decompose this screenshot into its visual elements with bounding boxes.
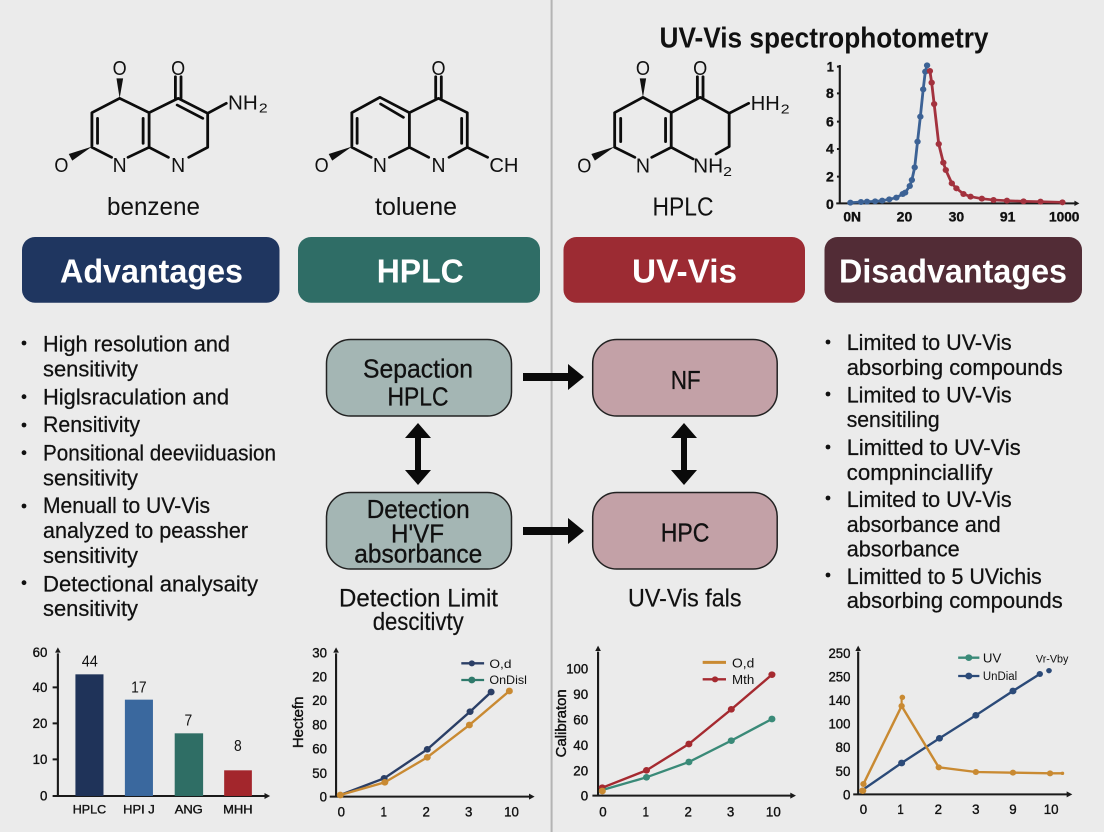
flow box: Separation HPLC <box>326 340 512 416</box>
chart: UV-Vis spectrum: 8 <box>826 85 834 101</box>
chart: calibration: Calibraton <box>553 689 569 757</box>
chart: bars <box>33 644 270 816</box>
molecule: HPLC: HH <box>751 93 780 115</box>
list: disadvantages: absorbing compounds <box>847 355 1063 380</box>
caption: detection limit <box>339 585 498 636</box>
chart: calibration: 40 <box>573 737 588 753</box>
caption: UV-Vis fals: UV-Vis fals <box>628 585 742 613</box>
molecule: benzene: O <box>171 57 185 80</box>
molecule: toluene: O <box>315 154 329 177</box>
chart: UV-Vis spectrum: 2 <box>826 169 834 184</box>
chart: UV line chart: 10 <box>1044 801 1059 817</box>
header: Advantages: Advantages <box>60 253 243 290</box>
list: disadvantages: Limitted to UV-Vis <box>847 435 1021 460</box>
chart: UV line chart: UnDial <box>983 669 1017 683</box>
chart: bars: 20 <box>33 715 48 731</box>
chart: line chart Hectefn: 10 <box>504 804 519 820</box>
header: Disadvantages: Disadvantages <box>839 253 1067 290</box>
chart: calibration <box>553 646 796 820</box>
molecule: HPLC: N <box>636 155 650 178</box>
molecule: benzene: N <box>171 154 185 177</box>
list: disadvantages: absorbing compounds <box>847 588 1063 613</box>
chart: line chart Hectefn: 60 <box>312 741 327 756</box>
flow box: Detection: Detection <box>367 494 470 524</box>
label: HPLC molecule: HPLC <box>652 192 714 222</box>
list: disadvantages: Limited to UV-Vis <box>847 330 1012 355</box>
list: disadvantages: sensitiling <box>847 407 940 432</box>
chart: line chart Hectefn: 1 <box>381 804 387 820</box>
chart: calibration: 2 <box>684 804 692 820</box>
caption: detection limit: descitivty <box>373 608 464 636</box>
chart: calibration: 90 <box>573 686 588 702</box>
header: HPLC <box>298 237 540 303</box>
list: advantages: Ponsitional deeviiduasion <box>43 441 276 466</box>
chart: calibration: 60 <box>573 712 588 727</box>
chart: bars: HPI J <box>123 803 155 816</box>
list: advantages: High resolution and <box>43 332 230 357</box>
molecule: toluene <box>315 57 518 177</box>
arrow: detection to HPC <box>523 518 584 544</box>
molecule: HPLC: 2 <box>781 102 790 116</box>
molecule: toluene: O <box>431 57 446 80</box>
chart: UV-Vis spectrum: 0N <box>843 209 861 224</box>
chart: line chart Hectefn: O,d <box>489 657 511 671</box>
chart: bars: 7 <box>185 713 192 729</box>
chart: UV line chart: 140 <box>828 692 851 708</box>
arrow: NF HPC double <box>671 423 697 485</box>
flow box: NF: NF <box>671 365 701 395</box>
chart: UV line chart: 250 <box>828 669 851 684</box>
chart: line chart Hectefn: 30 <box>312 645 327 660</box>
list: advantages: sensitivity <box>43 596 138 621</box>
list: disadvantages <box>826 330 1063 613</box>
molecule: HPLC: O <box>636 58 650 80</box>
molecule: toluene: CH <box>489 154 518 177</box>
chart: line chart Hectefn: 3 <box>465 804 473 820</box>
chart: UV-Vis spectrum: 1000 <box>1049 209 1080 224</box>
list: advantages: analyzed to peassher <box>43 518 248 543</box>
molecule: benzene: 2 <box>259 101 268 116</box>
title: UV-Vis spectrophotometry <box>660 22 988 54</box>
molecule: benzene: O <box>54 154 68 177</box>
caption: detection limit: Detection Limit <box>339 585 498 613</box>
chart: bars: MHH <box>223 803 253 816</box>
chart: line chart Hectefn: 20 <box>312 692 327 708</box>
list: advantages: Rensitivity <box>43 412 140 437</box>
chart: calibration: 1 <box>643 804 649 820</box>
chart: UV line chart: 80 <box>836 739 851 755</box>
chart: calibration: Mth <box>732 672 754 687</box>
flow box: Detection: absorbance <box>354 539 482 569</box>
chart: line chart Hectefn: 20 <box>312 669 327 684</box>
chart: calibration: 100 <box>566 661 588 677</box>
chart: UV-Vis spectrum: 4 <box>826 141 834 157</box>
chart: UV-Vis spectrum: 30 <box>949 209 964 224</box>
chart: line chart Hectefn: 50 <box>312 765 327 781</box>
flow box: NF <box>593 340 777 416</box>
molecule: HPLC <box>577 58 790 179</box>
label: toluene: toluene <box>375 193 457 221</box>
chart: bars: 60 <box>33 644 48 660</box>
list: disadvantages: Limited to UV-Vis <box>847 487 1012 512</box>
chart: bars: 44 <box>82 654 98 671</box>
flow box: Detection <box>326 492 512 569</box>
header: Disadvantages <box>824 237 1082 303</box>
molecule: HPLC: 2 <box>723 164 732 179</box>
bar: HPI J <box>125 700 153 796</box>
chart: calibration: O,d <box>732 656 754 671</box>
chart: UV line chart: 50 <box>836 763 851 779</box>
chart: bars: 8 <box>234 738 242 755</box>
list: advantages <box>22 332 276 621</box>
chart: line chart Hectefn: Hectefn <box>290 696 306 748</box>
chart: UV line chart: 100 <box>828 716 851 732</box>
list: disadvantages: Limitted to 5 UVichis <box>847 564 1042 589</box>
list: advantages: sensitivity <box>43 543 138 568</box>
molecule: toluene: N <box>373 154 387 177</box>
list: disadvantages: absorbance <box>847 537 960 562</box>
chart: bars: 0 <box>40 788 48 804</box>
flow box: Separation HPLC: Sepaction <box>363 354 473 384</box>
chart: UV-Vis spectrum: 20 <box>897 209 912 224</box>
molecule: HPLC: NH <box>693 155 723 178</box>
chart: UV line chart: 0 <box>860 801 867 817</box>
chart: line chart Hectefn: 80 <box>312 717 327 732</box>
list: disadvantages: Limited to UV-Vis <box>847 383 1012 408</box>
chart: calibration: 20 <box>573 763 588 778</box>
chart: UV-Vis spectrum: 1 <box>827 59 834 74</box>
bar: ANG <box>175 733 203 796</box>
flow box: Detection: H'VF <box>391 519 444 549</box>
flow box: HPC: HPC <box>661 518 709 548</box>
chart: bars: 17 <box>131 680 147 697</box>
chart: calibration: 0 <box>599 804 607 820</box>
chart: line chart Hectefn: 0 <box>320 789 327 804</box>
chart: line chart Hectefn: 0 <box>338 804 345 820</box>
chart: UV-Vis spectrum: 6 <box>826 114 834 129</box>
flow box: HPC <box>593 492 777 569</box>
molecule: HPLC: O <box>577 155 591 178</box>
chart: UV line chart: 2 <box>935 801 942 817</box>
chart: line chart Hectefn: 2 <box>423 804 430 820</box>
chart: bars: 40 <box>33 679 48 695</box>
molecule: benzene: N <box>113 154 127 177</box>
chart: line chart Hectefn: OnDisl <box>489 673 527 687</box>
chart: bars: 10 <box>33 751 48 767</box>
chart: UV line chart: 1 <box>897 801 904 817</box>
chart: calibration: 0 <box>581 788 588 804</box>
chart: UV line chart: 250 <box>828 645 851 661</box>
header: UV-Vis: UV-Vis <box>632 253 737 290</box>
chart: UV-Vis spectrum: 91 <box>1000 209 1016 224</box>
chart: line chart Hectefn <box>290 645 535 820</box>
arrow: separation detection double <box>405 423 431 485</box>
header: Advantages <box>22 237 280 303</box>
molecule: benzene <box>54 57 268 177</box>
chart: UV line chart: UV <box>983 651 1002 666</box>
molecule: toluene: N <box>431 154 446 177</box>
chart: calibration: 10 <box>766 804 781 820</box>
chart: UV-Vis spectrum: 0 <box>826 196 834 212</box>
chart: UV line chart: 9 <box>1009 801 1017 817</box>
list: advantages: sensitivity <box>43 357 138 382</box>
list: advantages: sensitivity <box>43 466 138 491</box>
list: advantages: Menuall to UV-Vis <box>43 493 210 518</box>
molecule: benzene: O <box>113 57 127 80</box>
molecule: HPLC: O <box>693 58 707 80</box>
chart: calibration: 3 <box>727 804 734 820</box>
header: UV-Vis <box>564 237 805 303</box>
bar: MHH <box>224 770 252 796</box>
chart: bars: HPLC <box>73 803 106 816</box>
chart: UV line chart: Vr-Vby <box>1036 654 1069 666</box>
label: benzene: benzene <box>107 193 200 221</box>
list: disadvantages: compnincialIify <box>847 460 993 485</box>
flow box: Separation HPLC: HPLC <box>388 382 448 412</box>
chart: UV line chart: 0 <box>843 787 851 803</box>
bar: HPLC <box>75 674 103 796</box>
molecule: benzene: NH <box>228 92 258 114</box>
chart: UV-Vis spectrum <box>826 59 1080 224</box>
list: disadvantages: absorbance and <box>847 512 1001 537</box>
list: advantages: Detectional analysaity <box>43 572 258 597</box>
header: HPLC: HPLC <box>377 253 464 290</box>
arrow: separation to NF <box>523 364 584 390</box>
chart: UV line chart <box>828 645 1072 817</box>
list: advantages: Higlsraculation and <box>43 385 229 410</box>
chart: bars: ANG <box>175 803 203 816</box>
chart: UV line chart: 3 <box>972 801 980 817</box>
